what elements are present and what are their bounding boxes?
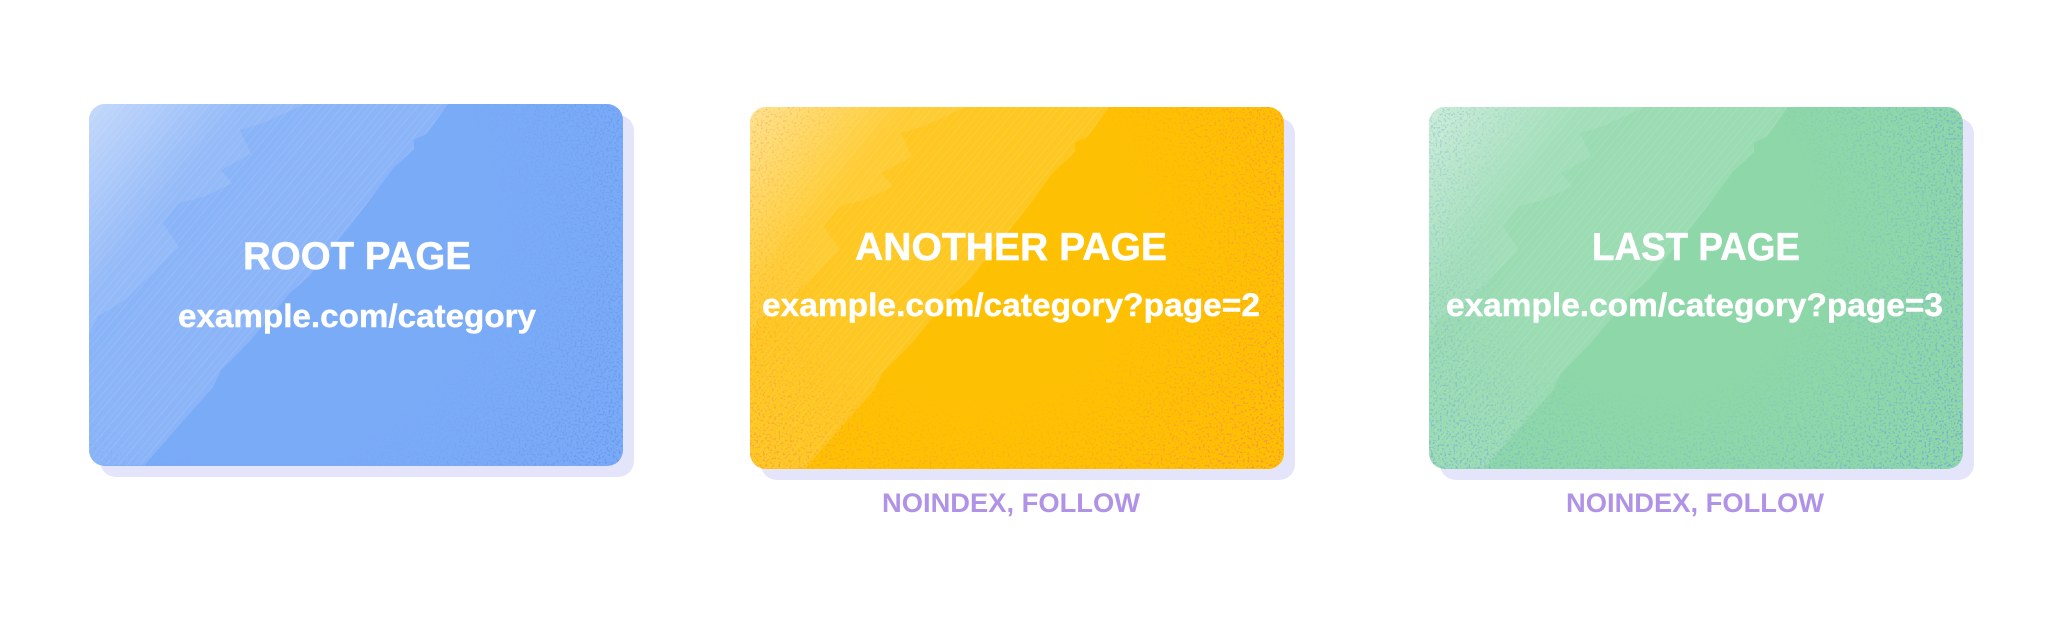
heading: another page: ANOTHER PAGE — [855, 226, 1167, 269]
card face — [89, 104, 623, 466]
card shadow — [100, 115, 634, 477]
card shadow — [1440, 118, 1974, 480]
label: noindex follow, page 3: NOINDEX, FOLLOW — [1566, 488, 1825, 518]
url: page 3: example.com/category?page=3 — [1446, 287, 1943, 323]
card face — [750, 107, 1284, 469]
url: page 2: example.com/category?page=2 — [762, 287, 1260, 323]
heading: root page: ROOT PAGE — [243, 235, 471, 278]
heading: last page: LAST PAGE — [1592, 226, 1800, 269]
panel: another page card — [750, 107, 1295, 480]
panel: last page card — [1429, 107, 1974, 480]
url: root page: example.com/category — [178, 298, 536, 334]
card shadow — [761, 118, 1295, 480]
card face — [1429, 107, 1963, 469]
label: noindex follow, page 2: NOINDEX, FOLLOW — [882, 488, 1141, 518]
infographic canvas — [89, 104, 1974, 516]
panel: root page card — [89, 104, 634, 477]
